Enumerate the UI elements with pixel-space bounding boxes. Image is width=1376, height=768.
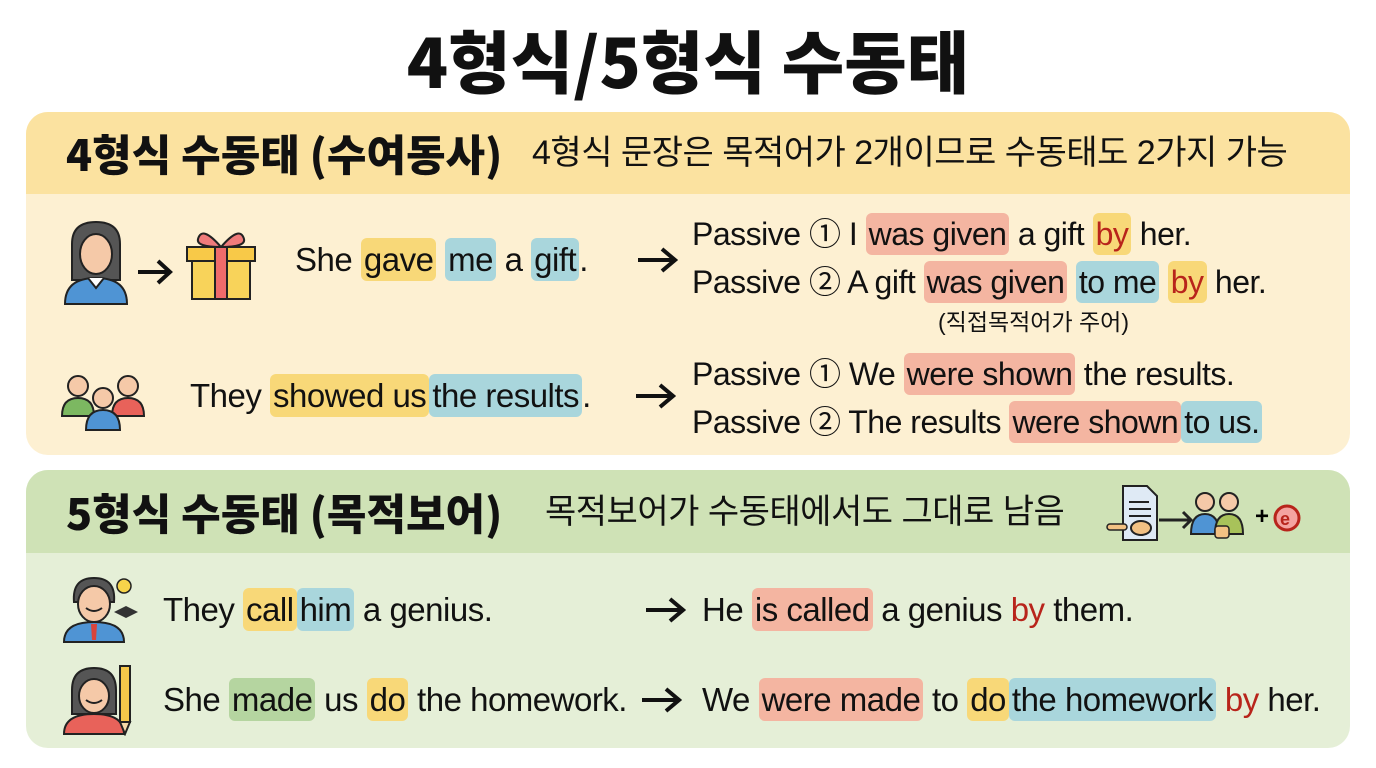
icon: document to people plus e: e xyxy=(1280,509,1290,529)
icon: group xyxy=(61,375,145,431)
arrow 3 xyxy=(646,598,686,622)
arrow: woman to gift xyxy=(138,260,173,284)
subtitle: 4형식 문장은 목적어가 2개이므로 수동태도 2가지 가능 xyxy=(532,134,1287,172)
icon: woman xyxy=(64,221,128,305)
passive lines 1: Passive ① I was given a gift by her. xyxy=(692,216,1191,252)
passive lines 1: (직접목적어가 주어) xyxy=(938,309,1129,335)
icon: gift xyxy=(186,232,256,300)
passive lines 1 xyxy=(692,213,1266,335)
header band 5형식 xyxy=(26,470,1350,553)
passive lines 2 xyxy=(692,353,1262,443)
subtitle: 목적보어가 수동태에서도 그대로 남음 xyxy=(545,493,1064,531)
sentence 3: They callhim a genius. xyxy=(163,591,492,628)
passive lines 1: Passive ② A gift was given to me by her. xyxy=(692,264,1266,300)
passive 3: He is called a genius by them. xyxy=(702,591,1133,628)
icon: document to people plus e: + xyxy=(1255,503,1269,530)
arrow 2 xyxy=(636,384,676,408)
icon: document to people plus e xyxy=(1106,485,1300,541)
passive lines 2: Passive ② The results were shownto us. xyxy=(692,404,1259,440)
header band 4형식 xyxy=(26,112,1350,194)
passive 4: We were made to dothe homework by her. xyxy=(702,681,1320,718)
arrow 4 xyxy=(642,688,682,712)
panel: 4형식 xyxy=(26,112,1350,455)
sentence 4: She made us do the homework. xyxy=(163,681,627,718)
sentence 2: They showed usthe results. xyxy=(190,377,591,414)
sentence 1: She gave me a gift. xyxy=(295,241,588,278)
title: 4형식/5형식 수동태 xyxy=(407,9,969,108)
arrow 1 xyxy=(638,248,678,272)
icon: woman with pencil xyxy=(63,665,132,736)
panel: 5형식 xyxy=(26,470,1350,748)
icon: man with bulb xyxy=(63,577,138,643)
passive lines 2: Passive ① We were shown the results. xyxy=(692,356,1234,392)
heading: 4형식 수동태 (수여동사) xyxy=(66,122,502,184)
heading: 5형식 수동태 (목적보어) xyxy=(66,481,502,543)
